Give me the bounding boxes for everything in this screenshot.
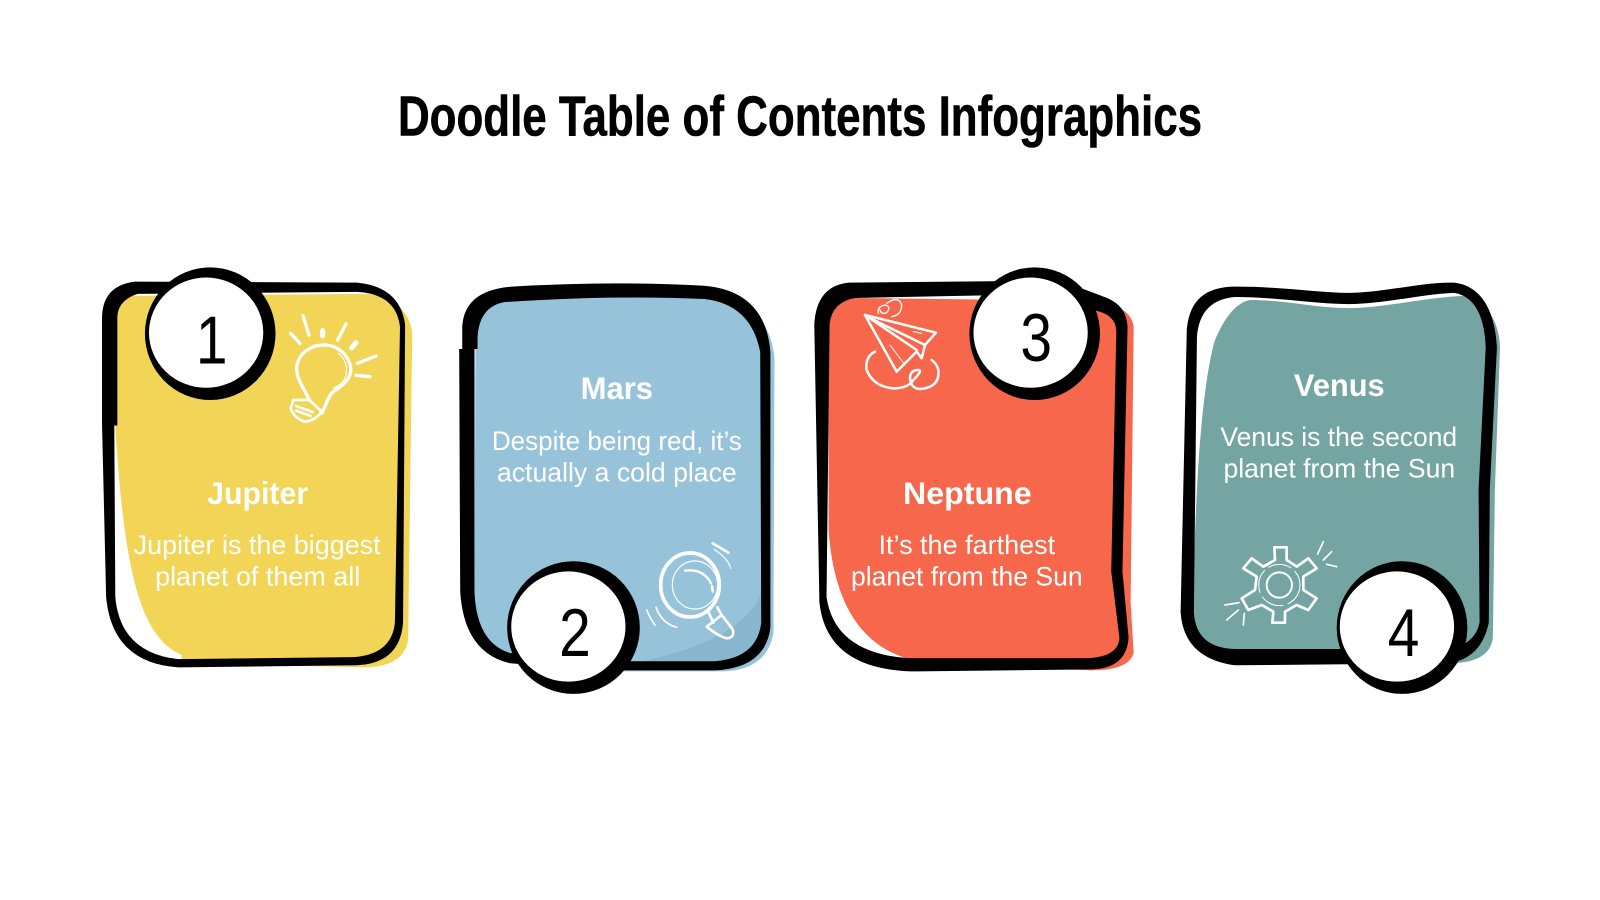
panel: Mars — [459, 283, 774, 694]
teal card fill — [1193, 296, 1500, 663]
number badge 3: 3 — [1020, 301, 1052, 376]
icon: gear — [1225, 542, 1337, 625]
icon: light bulb — [291, 316, 376, 422]
black doodle outline — [102, 282, 405, 667]
black doodle outline — [1181, 283, 1497, 665]
blue card fill — [474, 296, 774, 671]
title: Doodle Table of Contents Infographics — [398, 85, 1202, 148]
number badge 4 — [1337, 561, 1467, 694]
description: Venus: planet from the Sun — [1223, 454, 1455, 484]
description: Mars: actually a cold place — [497, 458, 737, 488]
description: Neptune: It’s the farthest — [879, 530, 1056, 560]
description: Neptune: planet from the Sun — [851, 562, 1083, 592]
heading: Mars: Mars — [581, 370, 653, 406]
description: Venus: Venus is the second — [1220, 422, 1457, 452]
panel: Venus — [1181, 283, 1500, 694]
black doodle outline — [459, 283, 770, 670]
number badge 2 — [507, 561, 640, 694]
number badge 1 — [145, 267, 276, 400]
icon: paper airplane — [865, 300, 938, 389]
number badge 2: 2 — [559, 596, 591, 671]
description: Jupiter: planet of them all — [155, 562, 360, 592]
darker shaded corner — [643, 587, 763, 661]
red card fill — [829, 298, 1134, 670]
black doodle outline — [814, 281, 1129, 671]
panel: Jupiter — [102, 267, 412, 667]
yellow card fill — [115, 294, 412, 667]
number badge 3 — [969, 267, 1100, 400]
description: Jupiter: Jupiter is the biggest — [134, 530, 381, 560]
description: Mars: Despite being red, it’s — [492, 426, 742, 456]
heading: Neptune: Neptune — [903, 475, 1032, 511]
number badge 4: 4 — [1388, 596, 1419, 671]
number badge 1: 1 — [196, 303, 228, 378]
panel: Neptune — [814, 267, 1134, 671]
heading: Venus: Venus — [1294, 367, 1385, 403]
heading: Jupiter: Jupiter — [207, 475, 308, 511]
icon: magnifying glass — [647, 543, 733, 638]
